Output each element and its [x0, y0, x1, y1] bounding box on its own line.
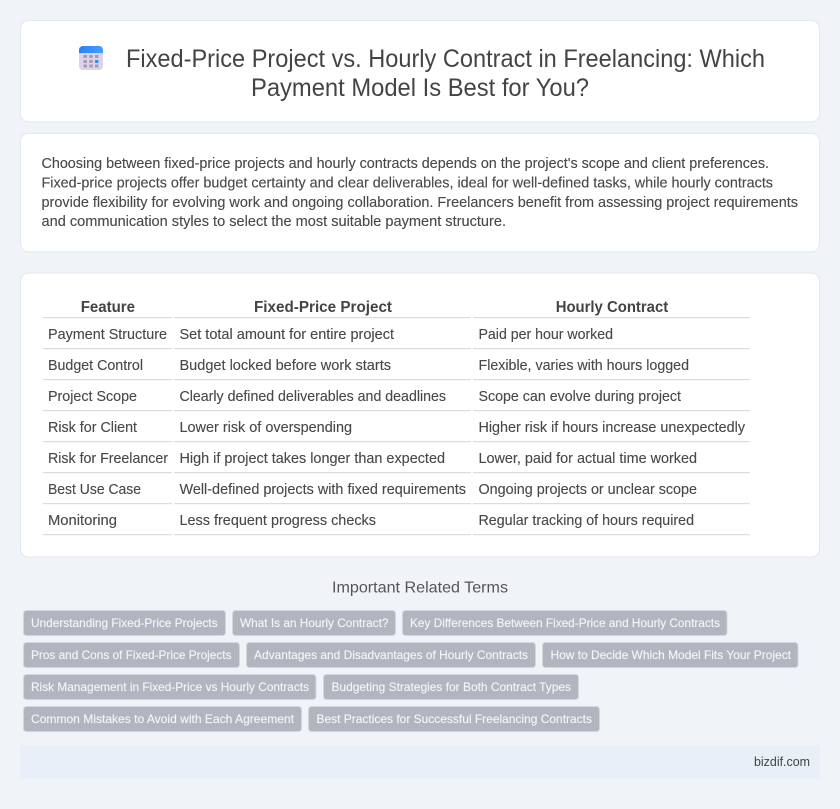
tag [24, 642, 240, 668]
row: best use case: Best Use Case [48, 482, 141, 498]
tag [232, 610, 396, 636]
tag [24, 610, 226, 636]
row: budget control: Budget locked before work starts [180, 358, 391, 374]
row: monitoring: Monitoring [48, 513, 117, 529]
tag [246, 642, 536, 668]
related terms tags [24, 610, 798, 732]
panel: intro paragraph [20, 134, 820, 252]
text block: intro [42, 156, 798, 230]
tag: Pros and Cons of Fixed-Price Projects [31, 648, 232, 662]
tag: Best Practices for Successful Freelancing Contracts [316, 712, 592, 726]
table header row [81, 299, 669, 316]
tag [24, 674, 316, 700]
table header row: Feature [81, 299, 135, 316]
table header row: Fixed-Price Project [254, 299, 393, 316]
tag: Budgeting Strategies for Both Contract Types [332, 680, 571, 694]
tag [24, 706, 302, 732]
row: risk for client: Lower risk of overspending [180, 420, 352, 436]
icon: calendar [79, 46, 103, 70]
tag: Understanding Fixed-Price Projects [31, 616, 218, 630]
row: risk for client [48, 420, 746, 436]
row: project scope [48, 389, 681, 405]
footer source text: bizdif.com [754, 755, 810, 769]
row: risk for freelancer: Risk for Freelancer [48, 451, 168, 467]
row: payment structure: Paid per hour worked [478, 327, 613, 343]
row: monitoring: Less frequent progress checks [180, 513, 376, 529]
title: Fixed-Price Project vs. Hourly Contract in Freelancing: Which [126, 45, 765, 73]
row: risk for freelancer [48, 451, 697, 467]
row: budget control: Flexible, varies with hours logged [478, 358, 689, 374]
heading: important related terms: Important Related Terms [332, 580, 508, 597]
text block: intro: provide flexibility for evolving work and ongoing collaboration. Freelancers benefit from assessing project requirements [42, 195, 798, 211]
row: risk for client: Risk for Client [48, 420, 137, 436]
panel: title header [20, 20, 820, 122]
tag: Common Mistakes to Avoid with Each Agreement [31, 712, 295, 726]
row: best use case [48, 482, 697, 498]
text block: intro: and communication styles to select the most suitable payment structure. [42, 214, 506, 230]
table header row: Hourly Contract [556, 299, 669, 316]
tag: Advantages and Disadvantages of Hourly Contracts [254, 648, 528, 662]
row: risk for client: Higher risk if hours increase unexpectedly [478, 420, 746, 436]
row: payment structure: Set total amount for entire project [180, 327, 394, 343]
tag [308, 706, 600, 732]
tag [542, 642, 798, 668]
row: budget control: Budget Control [48, 358, 143, 374]
panel: comparison table [20, 273, 820, 557]
tag: Key Differences Between Fixed-Price and Hourly Contracts [410, 616, 720, 630]
row: payment structure: Payment Structure [48, 327, 167, 343]
row: best use case: Ongoing projects or unclear scope [478, 482, 697, 498]
text block: intro: Choosing between fixed-price projects and hourly contracts depends on the project's scope and client preferences. [42, 156, 769, 172]
row: monitoring [48, 513, 694, 529]
row: risk for freelancer: Lower, paid for actual time worked [478, 451, 697, 467]
title [126, 45, 765, 102]
text block: intro: Fixed-price projects offer budget certainty and clear deliverables, ideal for well-defined tasks, while hourly contracts [42, 176, 773, 192]
row: project scope: Scope can evolve during project [478, 389, 681, 405]
tag: How to Decide Which Model Fits Your Project [550, 648, 792, 662]
row: budget control [48, 358, 689, 374]
row: best use case: Well-defined projects with fixed requirements [180, 482, 466, 498]
title: Payment Model Is Best for You? [251, 74, 589, 102]
tag [324, 674, 578, 700]
row: payment structure [48, 327, 613, 343]
row: monitoring: Regular tracking of hours required [478, 513, 694, 529]
footer [20, 745, 820, 779]
tag: Risk Management in Fixed-Price vs Hourly Contracts [31, 680, 309, 694]
row: project scope: Project Scope [48, 389, 137, 405]
row: project scope: Clearly defined deliverables and deadlines [180, 389, 446, 405]
row: risk for freelancer: High if project takes longer than expected [180, 451, 445, 467]
tag [402, 610, 727, 636]
tag: What Is an Hourly Contract? [240, 616, 389, 630]
